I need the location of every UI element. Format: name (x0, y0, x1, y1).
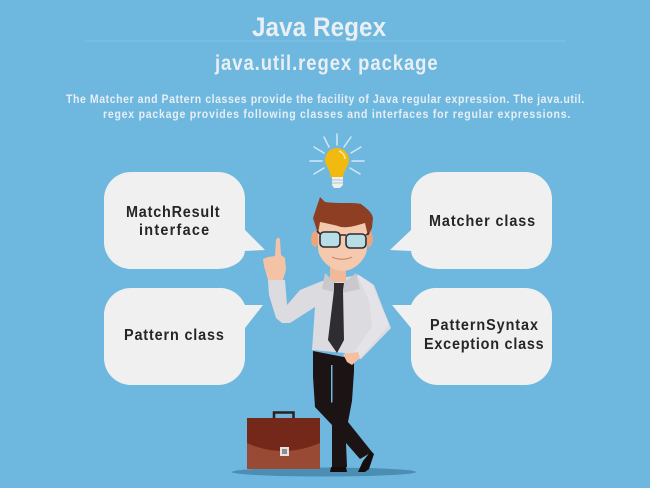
title: Java Regex (252, 13, 387, 42)
glasses (317, 231, 369, 248)
smile (332, 257, 352, 259)
icon: light bulb (310, 134, 364, 188)
panel: MatchResult interface (104, 172, 265, 269)
ears (311, 231, 319, 247)
panel: Pattern class: Pattern class (124, 326, 224, 344)
icon: briefcase (247, 412, 320, 469)
panel: PatternSyntax Exception class: PatternSyntax (430, 316, 539, 334)
intro text (66, 93, 584, 121)
intro text: regex package provides following classes and interfaces for regular expressions. (103, 108, 570, 121)
panel: Matcher class (390, 172, 552, 269)
trousers (313, 351, 372, 467)
figure: man pointing up (263, 197, 391, 472)
shoes (330, 467, 347, 472)
ground shadow (232, 468, 416, 476)
face (318, 220, 367, 271)
panel: PatternSyntax Exception class: Exception class (424, 335, 544, 353)
tie (328, 283, 344, 353)
hair (313, 197, 373, 236)
subtitle: java.util.regex package (214, 52, 438, 75)
panel: MatchResult interface: interface (139, 221, 209, 239)
neck (330, 262, 346, 282)
intro text: The Matcher and Pattern classes provide the facility of Java regular expression. The java.util. (66, 93, 584, 106)
panel: PatternSyntax Exception class (392, 288, 552, 385)
raised hand (263, 238, 286, 280)
panel: Pattern class (104, 288, 263, 385)
collar (322, 273, 360, 293)
shirt (268, 275, 391, 359)
hand at pocket (343, 352, 360, 365)
panel: Matcher class: Matcher class (429, 212, 535, 230)
panel: MatchResult interface: MatchResult (126, 203, 220, 221)
